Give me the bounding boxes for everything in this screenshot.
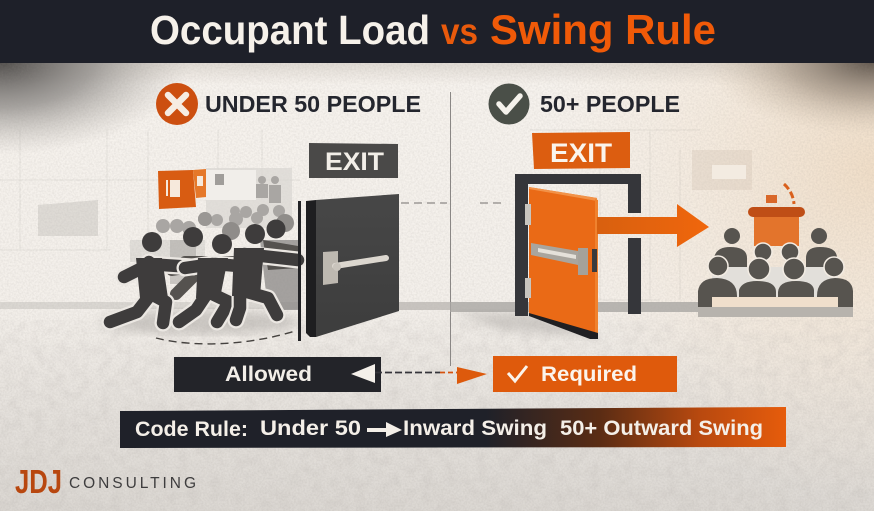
icon: x mark: [156, 83, 198, 125]
label: required: Required: [541, 363, 637, 386]
center divider: [450, 92, 452, 366]
exit sign dark: [309, 143, 398, 178]
title: swing rule: Swing Rule: [490, 6, 716, 53]
label: allowed: Allowed: [225, 363, 312, 386]
podium: [748, 184, 805, 246]
front row: [698, 256, 853, 307]
label: required: [493, 356, 677, 392]
back person: [172, 262, 232, 294]
outward door: [525, 187, 598, 339]
door handle: [323, 251, 386, 285]
panel: 50+ people: [450, 84, 853, 339]
panel: under 50 people: [0, 83, 450, 344]
back row: [714, 228, 837, 267]
inward door: [298, 194, 399, 341]
code rule bar: [120, 407, 786, 448]
title: vs: vs: [441, 11, 478, 52]
audience: [698, 228, 853, 317]
logo: JDJ: [15, 463, 62, 500]
check icon: [508, 366, 527, 381]
dashed swing guide: [401, 202, 504, 204]
person 2: [179, 234, 250, 322]
swing arc: [156, 331, 295, 344]
logo: CONSULTING: [69, 475, 196, 492]
middle row: [754, 243, 799, 261]
heading text: 50+ PEOPLE: [540, 91, 680, 117]
arrow: [367, 422, 402, 437]
arrow outward: [597, 204, 709, 247]
title: occupant load: Occupant Load: [150, 7, 430, 53]
heading: under 50 people: [156, 83, 421, 125]
icon: crowd rushing: [110, 220, 298, 323]
exit sign orange: EXIT: [550, 138, 613, 168]
floor band: [450, 302, 713, 338]
heading text: UNDER 50 PEOPLE: [205, 91, 421, 117]
door frame: [515, 174, 641, 316]
floor band and shadow: [0, 302, 450, 334]
hinges: [525, 204, 531, 298]
title bar: [0, 0, 874, 63]
person 3: [232, 224, 298, 320]
label: allowed: [174, 357, 381, 392]
person 1: [110, 232, 193, 323]
rule text: inward swing: Inward Swing: [403, 417, 547, 440]
icon: orange exit box: [158, 169, 206, 209]
rule text: under 50: Under 50: [260, 417, 361, 440]
crowd background: [130, 168, 298, 310]
exit sign dark: EXIT: [325, 148, 384, 176]
heading: 50+ people: [488, 84, 680, 124]
logo: [15, 463, 196, 500]
exit sign orange: [532, 132, 630, 169]
panic bar: [531, 243, 597, 275]
rule text: outward swing: 50+ Outward Swing: [560, 417, 763, 440]
rule text: code rule: Code Rule:: [135, 418, 248, 441]
double arrow: [351, 364, 487, 384]
icon: check mark: [488, 84, 530, 124]
